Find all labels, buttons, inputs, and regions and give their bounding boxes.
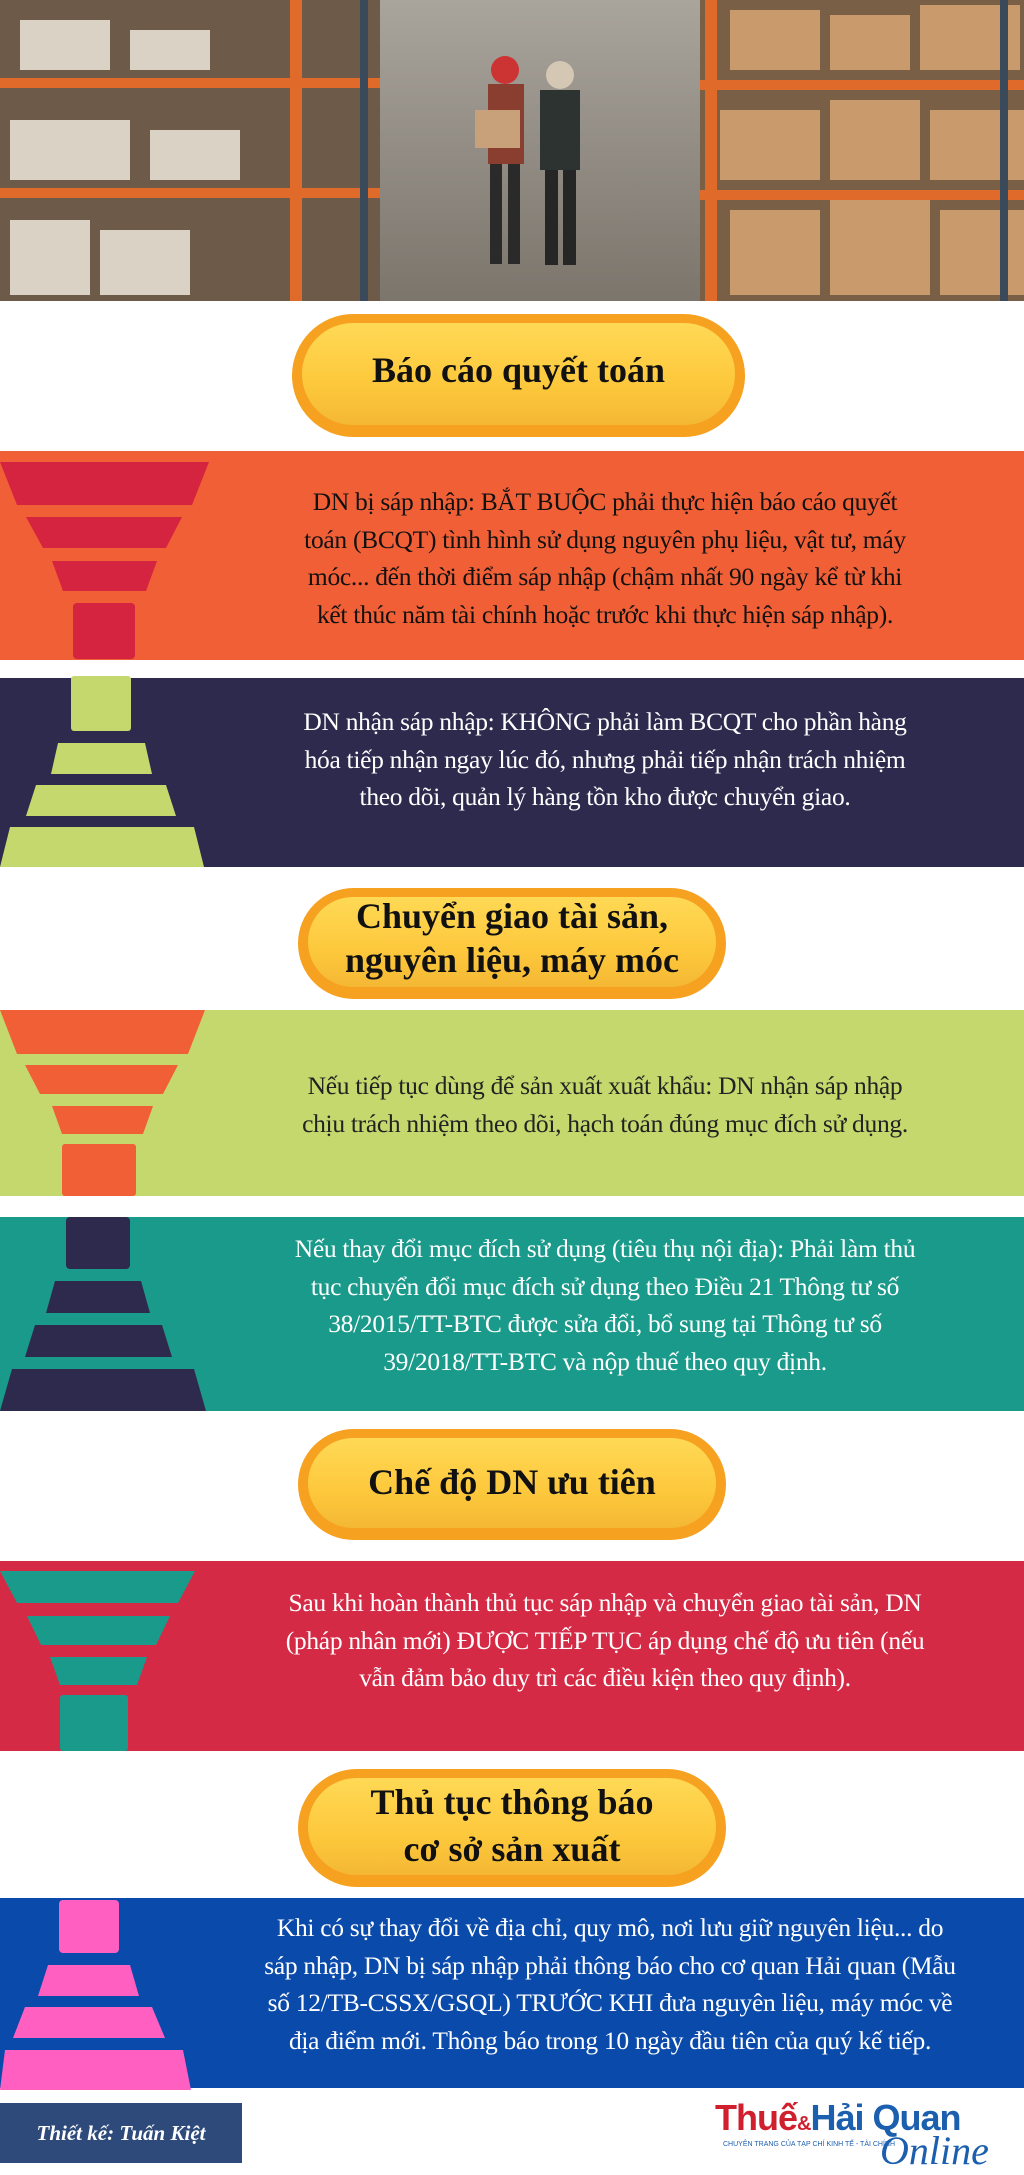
text: sau khi hoàn thành: Sau khi hoàn thành thủ tục sáp nhập và chuyển giao tài sản, DN xyxy=(289,1588,921,1617)
logo: Thuế & Hải Quan Online xyxy=(715,2097,989,2173)
text: DN nhận sáp nhập xyxy=(303,707,907,811)
text: nếu thay đổi mục đích: Nếu thay đổi mục đích sử dụng (tiêu thụ nội địa): Phải làm thủ xyxy=(295,1234,915,1263)
text: sau khi hoàn thành: (pháp nhân mới) ĐƯỢC TIẾP TỤC áp dụng chế độ ưu tiên (nếu xyxy=(286,1626,924,1654)
heading pill: Chế độ DN ưu tiên xyxy=(298,1429,726,1540)
heading pill: Báo cáo quyết toán: Báo cáo quyết toán xyxy=(372,350,665,390)
text: khi có sự thay đổi: số 12/TB-CSSX/GSQL) TRƯỚC KHI đưa nguyên liệu, máy móc về xyxy=(268,1988,952,2017)
text: DN bị sáp nhập: toán (BCQT) tình hình sử dụng nguyên phụ liệu, vật tư, máy xyxy=(304,524,906,554)
logo: Thuế & Hải Quan Online: CHUYÊN TRANG CỦA TẠP CHÍ KINH TẾ - TÀI CHÍNH xyxy=(723,2141,895,2148)
icon: teal funnel xyxy=(0,1571,195,1751)
text: DN bị sáp nhập: DN bị sáp nhập: BẮT BUỘC phải thực hiện báo cáo quyết xyxy=(313,487,897,516)
heading pill: Thủ tục thông báo cơ sở sản xuất xyxy=(298,1769,726,1887)
text: nếu thay đổi mục đích: 38/2015/TT-BTC được sửa đổi, bổ sung tại Thông tư số xyxy=(328,1309,882,1338)
text: DN nhận sáp nhập: theo dõi, quản lý hàng tồn kho được chuyển giao. xyxy=(360,782,850,811)
text: khi có sự thay đổi xyxy=(264,1913,956,2054)
heading pill: Chế độ DN ưu tiên: Chế độ DN ưu tiên xyxy=(368,1462,656,1502)
heading pill: Chuyển giao tài sản xyxy=(298,888,726,999)
icon: navy cone xyxy=(0,1217,206,1411)
icon: orange funnel xyxy=(0,1010,205,1196)
text: DN bị sáp nhập: móc... đến thời điểm sáp nhập (chậm nhất 90 ngày kể từ khi xyxy=(308,562,902,591)
panel: thủ tục thông báo (blue) xyxy=(0,1898,1024,2088)
logo: Thuế & Hải Quan Online: Thuế&Hải Quan xyxy=(715,2097,960,2138)
text: nếu thay đổi mục đích xyxy=(295,1234,916,1376)
text: khi có sự thay đổi: địa điểm mới. Thông báo trong 10 ngày đầu tiên của quý kế tiếp. xyxy=(289,2026,931,2054)
text: nếu tiếp tục dùng: Nếu tiếp tục dùng để sản xuất xuất khẩu: DN nhận sáp nhập xyxy=(308,1071,902,1100)
panel: DN nhận sáp nhập (navy) xyxy=(0,678,1024,867)
header photo: warehouse xyxy=(0,0,1024,301)
heading pill: Chuyển giao tài sản: nguyên liệu, máy móc xyxy=(345,940,679,980)
panel: tiếp tục sản xuất xuất khẩu (green) xyxy=(0,1010,1024,1196)
text: nếu tiếp tục dùng xyxy=(302,1071,908,1138)
text: nếu thay đổi mục đích: 39/2018/TT-BTC và nộp thuế theo quy định. xyxy=(383,1346,827,1376)
credit: designer xyxy=(0,2103,242,2163)
text: sau khi hoàn thành: vẫn đảm bảo duy trì các điều kiện theo quy định). xyxy=(359,1663,851,1692)
heading pill: Thủ tục thông báo cơ sở sản xuất: cơ sở sản xuất xyxy=(404,1829,620,1869)
icon: pink cone xyxy=(0,1900,191,2090)
panel: DN bị sáp nhập (orange) xyxy=(0,451,1024,660)
text: khi có sự thay đổi: Khi có sự thay đổi về địa chỉ, quy mô, nơi lưu giữ nguyên liệu... do xyxy=(277,1913,943,1942)
heading pill: Báo cáo quyết toán xyxy=(292,314,745,437)
text: sau khi hoàn thành xyxy=(286,1588,924,1692)
icon: red funnel xyxy=(0,462,209,659)
credit: designer: Thiết kế: Tuấn Kiệt xyxy=(37,2121,205,2145)
text: nếu tiếp tục dùng: chịu trách nhiệm theo dõi, hạch toán đúng mục đích sử dụng. xyxy=(302,1108,908,1138)
heading pill: Thủ tục thông báo cơ sở sản xuất: Thủ tục thông báo xyxy=(370,1782,654,1822)
text: DN nhận sáp nhập: hóa tiếp nhận ngay lúc đó, nhưng phải tiếp nhận trách nhiệm xyxy=(305,744,905,774)
panel: thay đổi mục đích (teal) xyxy=(0,1217,1024,1411)
text: khi có sự thay đổi: sáp nhập, DN bị sáp nhập phải thông báo cho cơ quan Hải quan (Mẫu xyxy=(264,1950,956,1980)
text: DN nhận sáp nhập: DN nhận sáp nhập: KHÔNG phải làm BCQT cho phần hàng xyxy=(303,707,907,736)
text: nếu thay đổi mục đích: tục chuyển đổi mục đích sử dụng theo Điều 21 Thông tư số xyxy=(311,1272,899,1300)
heading pill: Chuyển giao tài sản: Chuyển giao tài sản, xyxy=(356,896,668,936)
text: DN bị sáp nhập: kết thúc năm tài chính hoặc trước khi thực hiện sáp nhập). xyxy=(317,600,893,628)
panel: chế độ ưu tiên (red) xyxy=(0,1561,1024,1751)
logo: Thuế & Hải Quan Online: Online xyxy=(880,2128,989,2173)
text: DN bị sáp nhập xyxy=(304,487,906,628)
icon: green cone xyxy=(0,676,204,867)
